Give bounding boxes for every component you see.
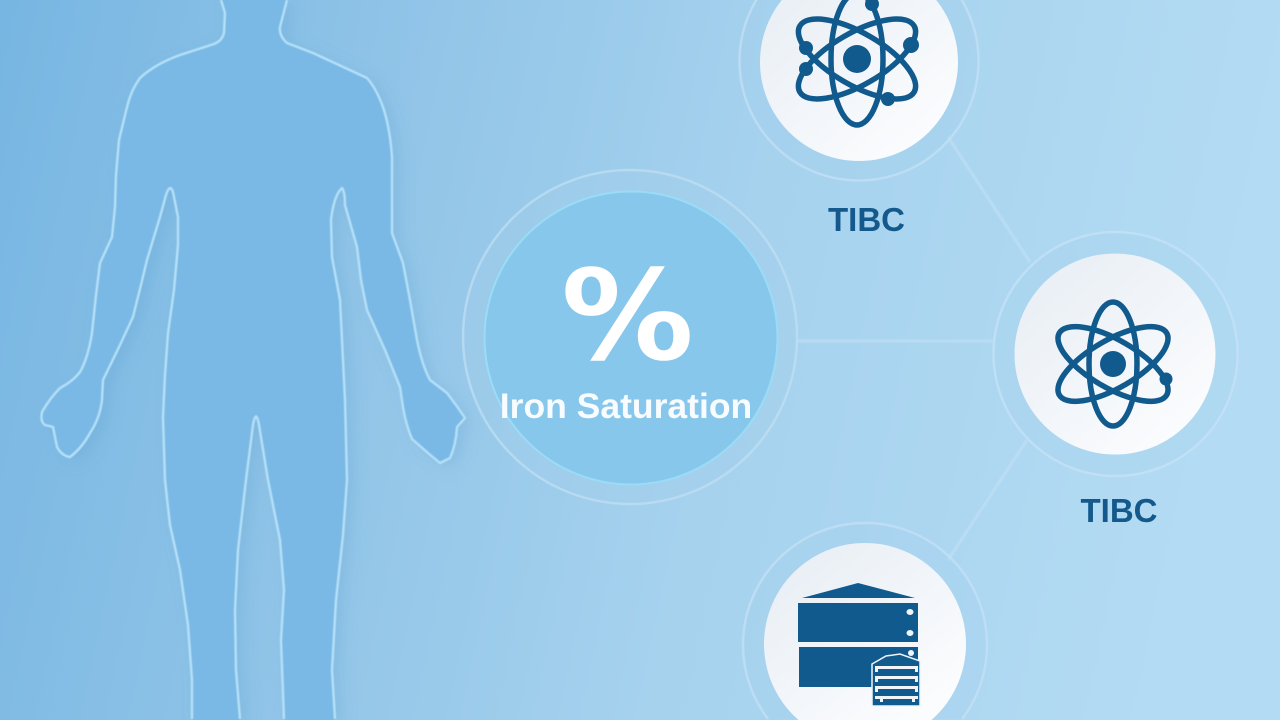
node: right TIBC: [994, 232, 1238, 529]
node: top TIBC: [740, 0, 978, 238]
icon: atom: [1047, 302, 1179, 426]
connector lines: [797, 137, 1030, 560]
label: right TIBC: TIBC: [1080, 492, 1158, 529]
label: iron saturation: Iron Saturation: [500, 386, 752, 426]
label: top TIBC: TIBC: [828, 201, 905, 238]
node: bottom storage: [743, 523, 987, 720]
icon: storage server with document: [798, 583, 920, 706]
panel: iron saturation circle: [463, 170, 797, 504]
icon: percent sign: %: [561, 244, 694, 389]
icon: atom with electrons: [787, 0, 927, 125]
human body silhouette: [41, 0, 465, 720]
